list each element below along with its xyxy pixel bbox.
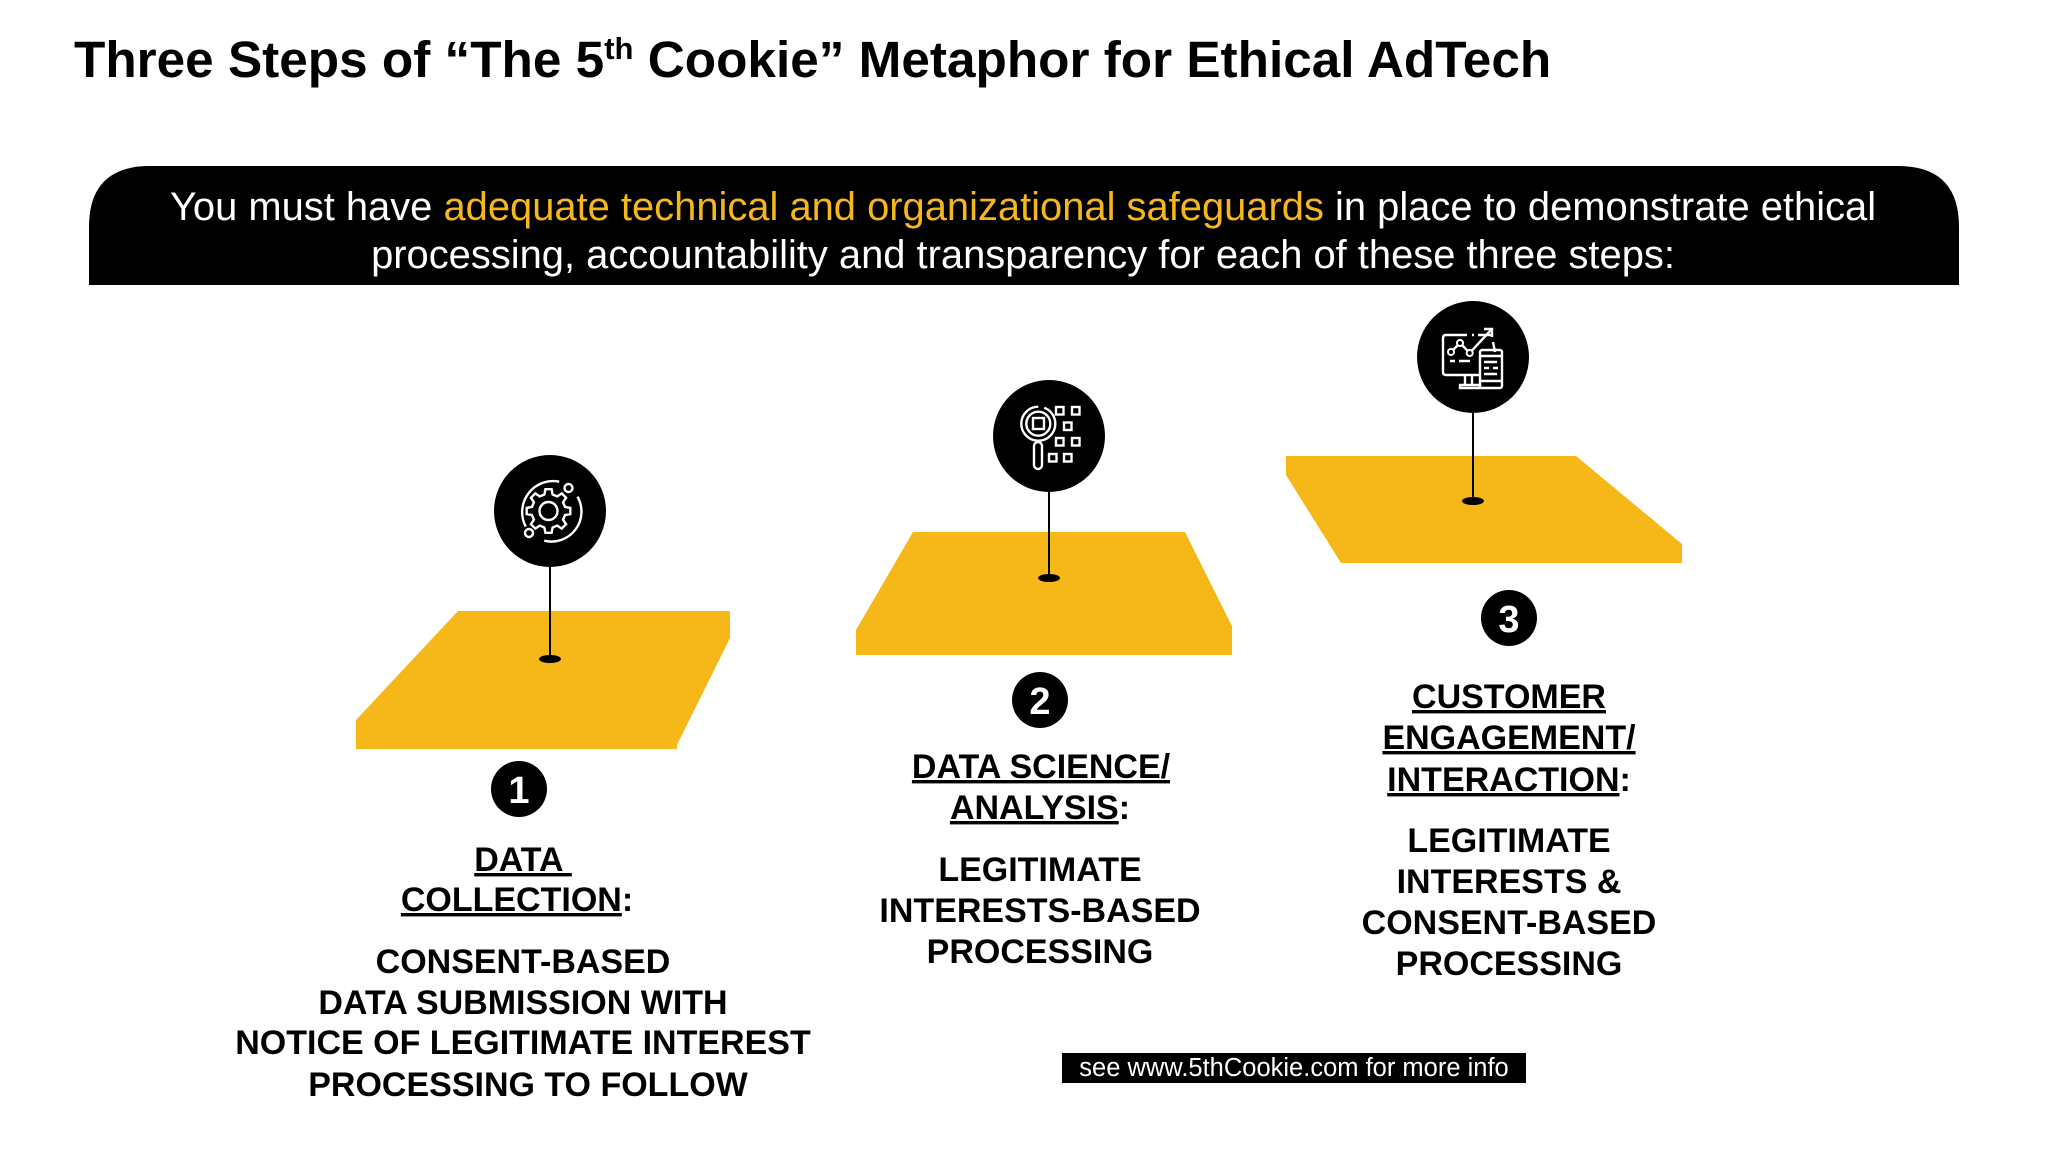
platform 1 xyxy=(356,611,730,749)
heading 2: DATA SCIENCE/ xyxy=(912,748,1171,786)
heading 1: DATA xyxy=(474,841,572,879)
step 2: data science xyxy=(856,380,1232,971)
description 1 xyxy=(235,943,811,1104)
description 2: PROCESSING xyxy=(927,933,1153,971)
step 1: data collection xyxy=(235,455,811,1104)
description 1: CONSENT-BASED xyxy=(376,943,670,981)
description 2: LEGITIMATE xyxy=(938,851,1142,889)
platform 3 xyxy=(1286,456,1682,563)
number badge 2 xyxy=(1012,672,1068,728)
heading 3: ENGAGEMENT/ xyxy=(1382,719,1636,757)
number badge 1 xyxy=(491,761,547,817)
step 3: customer engagement xyxy=(1286,301,1682,983)
title: Cookie” Metaphor for Ethical AdTech xyxy=(633,31,1551,88)
banner: processing, accountability and transparency for each of these three steps: xyxy=(371,233,1675,277)
heading 1 xyxy=(401,841,633,919)
title: th xyxy=(604,31,633,66)
heading 3 xyxy=(1382,678,1636,799)
description 1: DATA SUBMISSION WITH xyxy=(318,984,728,1022)
description 3 xyxy=(1362,822,1656,983)
title: Three Steps of “The 5 xyxy=(74,31,604,88)
heading 3: CUSTOMER xyxy=(1412,678,1606,716)
heading 2 xyxy=(912,748,1171,827)
pin 3 xyxy=(1462,400,1484,505)
icon: gear xyxy=(494,455,606,567)
heading 3: INTERACTION: xyxy=(1387,761,1631,799)
icon: magnifier xyxy=(993,380,1105,492)
pin 2 xyxy=(1038,478,1060,582)
number badge 3 xyxy=(1481,590,1537,646)
icon: dashboard xyxy=(1417,301,1529,413)
description 2: INTERESTS-BASED xyxy=(879,892,1201,930)
number badge 2: 2 xyxy=(1029,681,1051,723)
description 1: PROCESSING TO FOLLOW xyxy=(308,1066,749,1104)
heading 2: ANALYSIS: xyxy=(950,789,1130,827)
number badge 1: 1 xyxy=(508,770,530,812)
heading 1: COLLECTION: xyxy=(401,881,633,919)
description 3: INTERESTS & xyxy=(1397,863,1621,901)
number badge 3: 3 xyxy=(1498,599,1520,641)
description 3: LEGITIMATE xyxy=(1407,822,1611,860)
description 3: CONSENT-BASED xyxy=(1362,904,1656,942)
description 3: PROCESSING xyxy=(1396,945,1622,983)
footer link note: see www.5thCookie.com for more info xyxy=(1079,1054,1509,1082)
banner xyxy=(89,166,1959,285)
platform 2 xyxy=(856,532,1232,655)
banner: You must have adequate technical and organizational safeguards in place to demonstrate ethical xyxy=(170,185,1876,229)
description 2 xyxy=(879,851,1201,971)
description 1: NOTICE OF LEGITIMATE INTEREST xyxy=(235,1024,811,1062)
pin 1 xyxy=(539,560,561,663)
